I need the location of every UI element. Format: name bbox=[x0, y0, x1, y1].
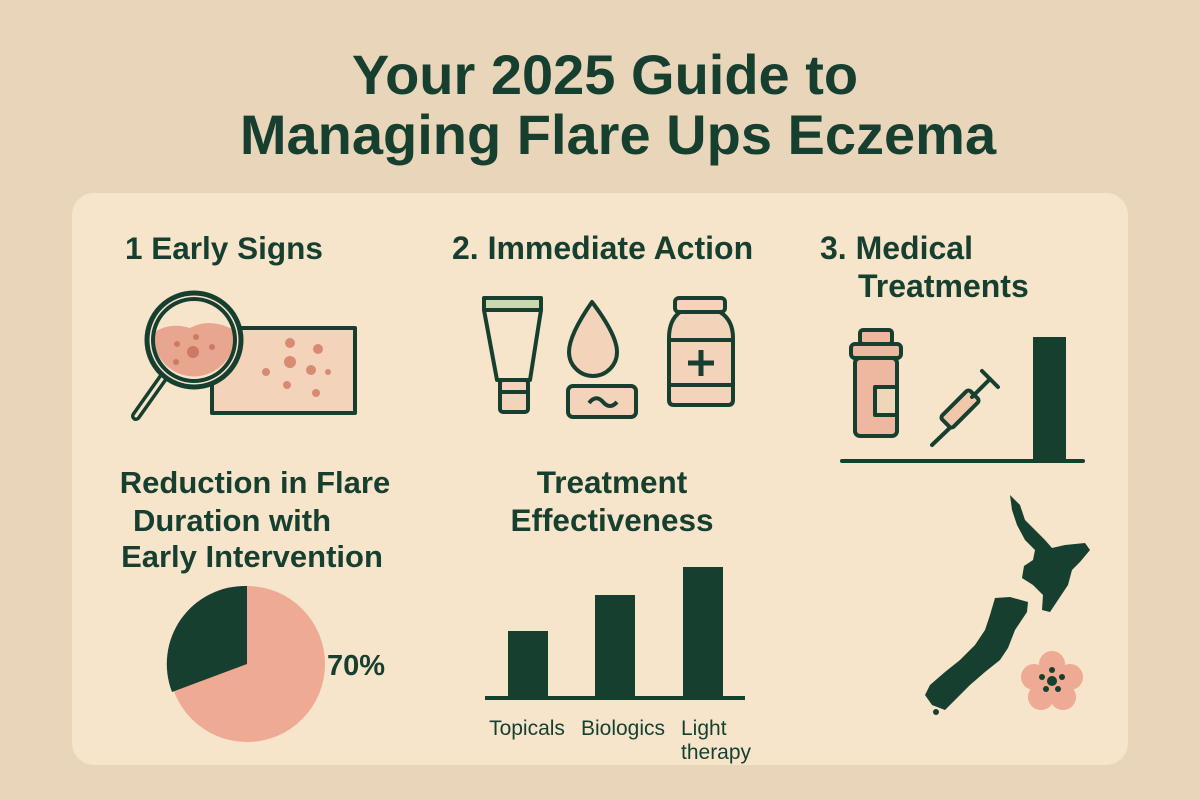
heading: reduction: Early Intervention bbox=[121, 539, 383, 574]
bar chart bbox=[485, 567, 752, 764]
label: 70%: 70% bbox=[327, 650, 385, 682]
icon: syringe bbox=[932, 371, 998, 445]
map: New Zealand bbox=[925, 495, 1090, 715]
heading: effectiveness: Effectiveness bbox=[510, 502, 714, 538]
icon: pill bottle bbox=[851, 330, 901, 436]
heading: medical treatments: 3. Medical bbox=[820, 230, 973, 266]
icon: flower bbox=[1021, 651, 1083, 710]
bar chart: therapy bbox=[681, 741, 752, 764]
title: Managing Flare Ups Eczema bbox=[240, 103, 997, 166]
bar: medical bbox=[842, 337, 1083, 461]
title: Your 2025 Guide to bbox=[352, 43, 858, 106]
icon: cream tube bbox=[484, 298, 541, 412]
panel: main bbox=[72, 193, 1128, 765]
heading: medical treatments bbox=[820, 230, 1029, 304]
pie chart bbox=[167, 586, 325, 742]
title bbox=[240, 43, 997, 166]
bar chart: Topicals bbox=[489, 717, 565, 740]
heading: medical treatments: Treatments bbox=[858, 268, 1029, 304]
heading: immediate action: 2. Immediate Action bbox=[452, 230, 753, 266]
bar chart: Light bbox=[681, 717, 727, 740]
heading: effectiveness: Treatment bbox=[537, 464, 688, 500]
icon: magnifier over skin bbox=[136, 293, 355, 416]
heading: early signs: 1 Early Signs bbox=[125, 230, 323, 266]
bar chart: Biologics bbox=[581, 717, 665, 740]
icon: drop and soap bbox=[568, 302, 636, 417]
heading: reduction: Reduction in Flare bbox=[120, 465, 390, 500]
heading: reduction: Duration with bbox=[133, 503, 331, 538]
heading: reduction bbox=[120, 465, 390, 574]
heading: effectiveness bbox=[510, 464, 714, 538]
icon: medicine jar bbox=[669, 298, 733, 405]
